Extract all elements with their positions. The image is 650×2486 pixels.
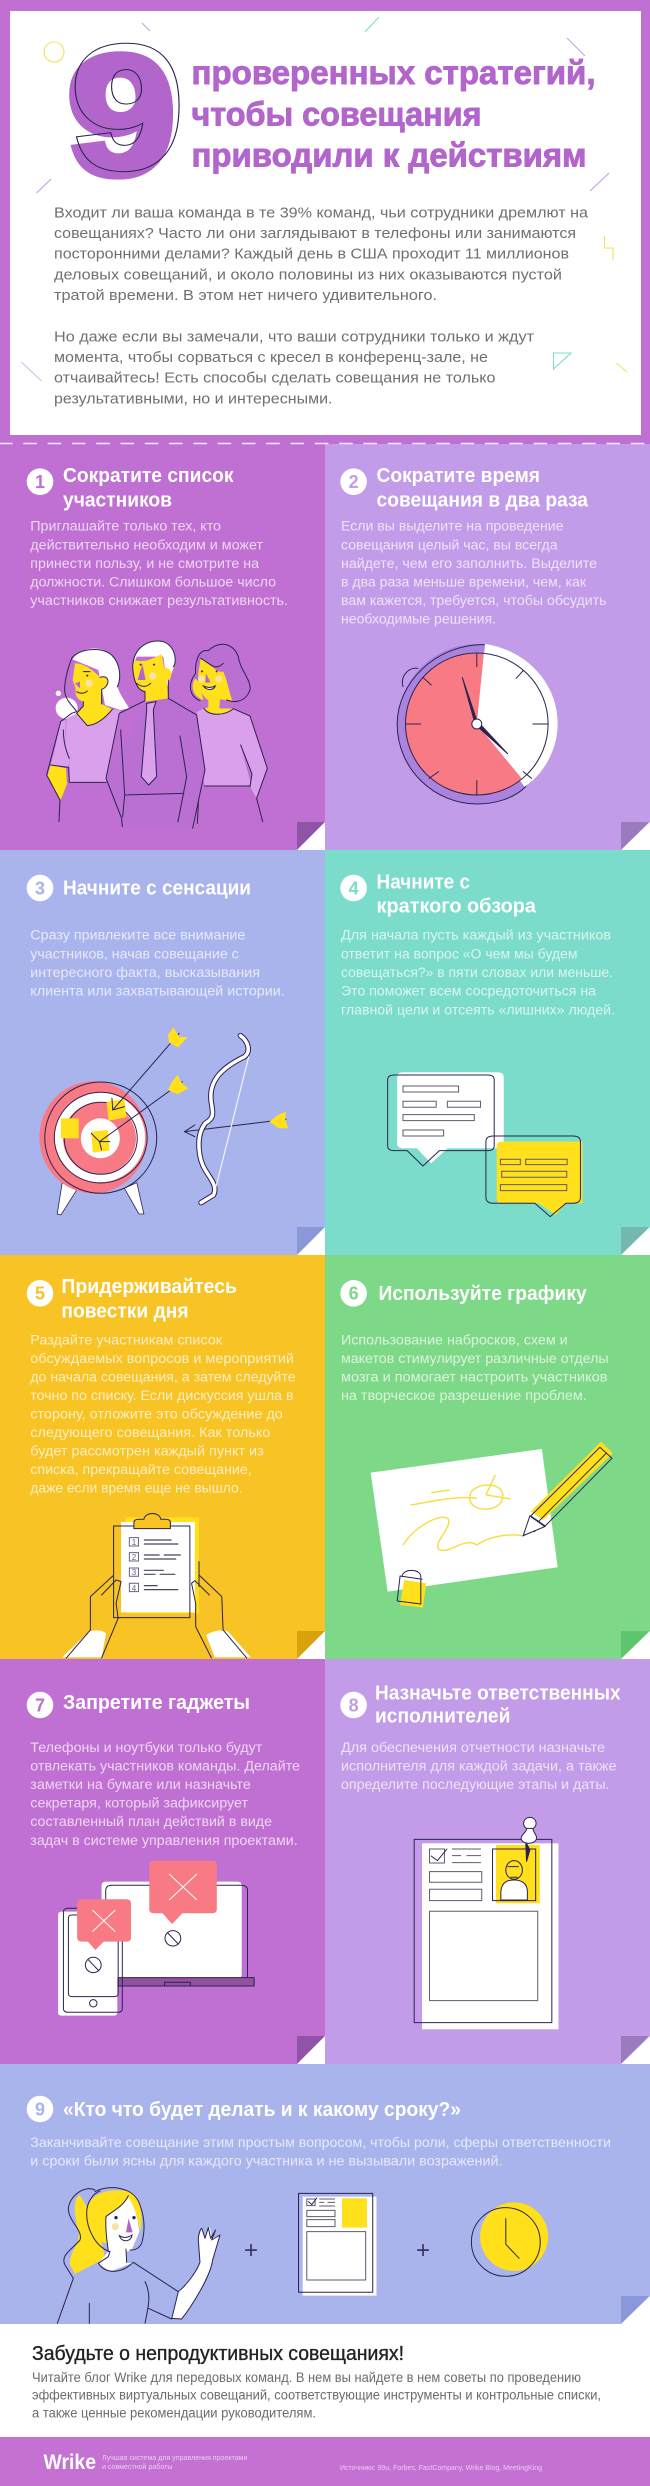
page fold 4	[621, 1227, 650, 1255]
intro text: отчаивайтесь! Есть способы сделать совещания не только	[54, 371, 496, 387]
clipboard numbers: 1	[132, 1538, 137, 1547]
heading 9: «Кто что будет делать и к какому сроку?»	[63, 2099, 461, 2121]
illustration: task card with pin	[414, 1817, 558, 2029]
closing text: эффективных виртуальных совещаний, соответствующие инструменты и контрольные списки,	[32, 2388, 601, 2403]
illustration: clipboard and hands	[62, 1514, 251, 1658]
title: приводили к действиям	[192, 137, 586, 174]
badge 2	[340, 468, 367, 495]
big numeral 9	[69, 42, 180, 180]
heading 2: совещания в два раза	[376, 490, 589, 512]
panel: 7 ban gadgets	[0, 1659, 325, 2064]
text 1: должности. Слишком большое число	[30, 574, 276, 589]
text 5: даже если время еще не вышло.	[30, 1481, 243, 1496]
text 4	[341, 928, 615, 1017]
text 4: совещаться?» в пяти словах или меньше.	[341, 965, 613, 980]
text 5: следующего совещания. Как только	[30, 1425, 270, 1440]
dashed seam	[0, 442, 650, 444]
panel: 9 who does what by when	[0, 2064, 650, 2324]
badge 7	[27, 1692, 53, 1718]
heading 1	[63, 465, 234, 512]
man	[106, 641, 205, 828]
closing text	[32, 2370, 601, 2420]
page fold 2	[621, 822, 650, 850]
text 1	[30, 519, 288, 608]
heading 8: исполнителей	[375, 1706, 510, 1728]
intro text: тратой времени. В этом нет ничего удивительного.	[54, 288, 437, 304]
panel: 5 agenda	[0, 1255, 325, 1659]
text 2: вам кажется, требуется, чтобы обсудить	[341, 593, 606, 608]
illustration: chat bubbles	[388, 1072, 583, 1217]
intro text: совещаниях? Часто ли они заглядывают в телефоны или занимаются	[54, 226, 576, 242]
text 3: Сразу привлеките все внимание	[30, 928, 245, 943]
text 8: исполнителя для каждой задачи, а также	[341, 1759, 616, 1774]
clipboard numbers: 3	[132, 1568, 137, 1577]
intro text: момента, чтобы сорваться с кресел в конференц-зале, не	[54, 350, 488, 366]
badge 1: 1	[35, 472, 45, 492]
heading 6: Используйте графику	[378, 1283, 588, 1305]
title: проверенных стратегий,	[192, 54, 596, 91]
text 1: действительно необходим и может	[30, 537, 263, 552]
text 7: отвлекать участников команды. Делайте	[30, 1759, 300, 1774]
panel: 1 fewer participants	[0, 444, 325, 850]
intro text	[54, 205, 589, 407]
clipboard numbers: 2	[132, 1553, 137, 1562]
page fold 5	[297, 1631, 325, 1659]
big numeral 9: 9	[67, 20, 176, 210]
closing text: а также ценные рекомендации руководителям.	[32, 2405, 316, 2420]
right woman	[190, 644, 267, 823]
panel: header	[0, 0, 650, 450]
badge 9	[27, 2096, 53, 2122]
heading 3: Начните с сенсации	[63, 877, 251, 899]
intro text: посторонними делами? Каждый день в США проходит 11 миллионов	[54, 247, 569, 263]
badge 4	[340, 875, 367, 901]
text 7: Телефоны и ноутбуки только будут	[30, 1740, 262, 1755]
text 8: определите последующие этапы и даты.	[341, 1777, 610, 1792]
panel: 6 graphics	[325, 1255, 650, 1659]
badge 5: 5	[35, 1284, 45, 1304]
badge 4: 4	[349, 878, 359, 898]
text 6: мозга и помогает настроить участников	[341, 1369, 607, 1384]
clipboard numbers: 4	[132, 1584, 137, 1593]
text 1: участников снижает результативность.	[30, 593, 288, 608]
left woman	[47, 649, 129, 822]
text 6	[341, 1332, 609, 1403]
heading 4	[376, 871, 537, 917]
badge 3	[27, 875, 53, 901]
text 7: секретаря, который зафиксирует	[30, 1796, 248, 1811]
text 5: точно по списку. Если дискуссия ушла в	[30, 1388, 294, 1403]
heading 4: краткого обзора	[376, 895, 537, 917]
illustration: three people	[47, 641, 267, 828]
badge 6	[340, 1280, 367, 1307]
badge 7: 7	[35, 1695, 45, 1715]
tagline: и совместной работы	[102, 2462, 172, 2471]
badge 9: 9	[35, 2099, 45, 2119]
text 5	[30, 1332, 296, 1496]
text 5: списка, прекращайте совещание,	[30, 1462, 252, 1477]
panel: 8 assign owners	[325, 1659, 650, 2064]
text 2: совещания целый час, вы всегда	[341, 537, 558, 552]
illustration: laptop and phone	[58, 1861, 254, 2016]
clipboard numbers	[132, 1538, 137, 1593]
badge 5	[27, 1280, 53, 1307]
illustration: waving woman	[57, 2188, 220, 2323]
illustration: clock	[397, 644, 558, 804]
heading 4: Начните с	[376, 871, 470, 893]
decorative confetti	[22, 17, 627, 381]
text 9: Заканчивайте совещание этим простым вопросом, чтобы роли, сферы ответственности	[30, 2135, 611, 2150]
text 4: Это поможет всем сосредоточиться на	[341, 984, 597, 999]
text 3	[30, 928, 285, 999]
heading 5	[61, 1276, 237, 1323]
text 2: необходимые решения.	[341, 612, 496, 626]
illustration: task card	[299, 2193, 376, 2296]
text 5: Раздайте участникам список	[30, 1332, 222, 1347]
logo: Wrike	[44, 2451, 96, 2474]
text 9	[30, 2135, 611, 2169]
heading 8	[375, 1682, 621, 1728]
heading 5: повестки дня	[61, 1301, 189, 1323]
text 7: составленный план действий в виде	[30, 1814, 272, 1829]
heading 1: участников	[63, 490, 172, 512]
illustration: target and bow	[39, 1027, 288, 1215]
plus sign: +	[244, 2237, 258, 2264]
text 3: участников, начав совещание с	[30, 946, 239, 961]
closing call to action	[32, 2343, 601, 2420]
intro text: результативными, но и интересными.	[54, 391, 332, 407]
heading 7: Запретите гаджеты	[63, 1692, 250, 1714]
heading 2	[376, 465, 589, 512]
plus sign: +	[416, 2237, 430, 2264]
text 5: до начала совещания, а затем следуйте	[30, 1369, 296, 1384]
text 2: найдете, чем его заполнить. Выделите	[341, 556, 597, 571]
heading 5: Придерживайтесь	[61, 1276, 237, 1298]
badge 1	[27, 468, 53, 495]
text 5: будет рассмотрен каждый пункт из	[30, 1444, 264, 1459]
badge 8: 8	[349, 1695, 359, 1715]
page fold 1	[297, 822, 325, 850]
heading 2: Сократите время	[376, 465, 540, 487]
text 2: Если вы выделите на проведение	[341, 519, 564, 534]
heading 8: Назначьте ответственных	[375, 1682, 621, 1704]
badge 3: 3	[35, 878, 45, 898]
illustration: sketch and pencil	[371, 1442, 613, 1608]
text 5: обсуждаемых вопросов и мероприятий	[30, 1351, 294, 1366]
text 7: заметки на бумаге или назначьте	[30, 1777, 251, 1792]
footer	[0, 2437, 650, 2486]
text 3: интересного факта, высказывания	[30, 965, 260, 980]
panel: 2 halve the time	[325, 444, 650, 850]
tagline: Лучшая система для управления проектами	[102, 2453, 248, 2462]
page fold 3	[297, 1227, 325, 1255]
title: чтобы совещания	[192, 96, 482, 133]
closing text: Читайте блог Wrike для передовых команд. В нем вы найдете в нем советы по проведению	[32, 2370, 581, 2385]
title	[192, 54, 596, 174]
text 1: принести пользу, и не смотрите на	[30, 556, 260, 571]
text 3: клиента или захватывающей истории.	[30, 984, 285, 999]
text 4: Для начала пусть каждый из участников	[341, 928, 611, 943]
text 6: Использование набросков, схем и	[341, 1332, 568, 1347]
page fold 6	[621, 1631, 650, 1659]
text 7	[30, 1740, 300, 1848]
page fold 9	[621, 2296, 650, 2324]
sources: Источники: 99u, Forbes, FastCompany, Wrike Blog, MeetingKing	[340, 2463, 542, 2472]
text 2: в два раза меньше времени, чем, как	[341, 574, 586, 589]
text 9: и сроки были ясны для каждого участника и не вызывали возражений.	[30, 2154, 502, 2169]
closing heading: Забудьте о непродуктивных совещаниях!	[32, 2343, 404, 2365]
illustration: yellow clock	[471, 2202, 548, 2276]
badge 8	[340, 1692, 367, 1718]
intro text: Входит ли ваша команда в те 39% команд, чьи сотрудники дремлют на	[54, 205, 589, 221]
badge 6: 6	[349, 1284, 359, 1304]
text 6: на творческое разрешение проблем.	[341, 1388, 587, 1403]
page fold 7	[297, 2036, 325, 2064]
page fold 8	[621, 2036, 650, 2064]
panel: 4 brief overview	[325, 850, 650, 1255]
intro text: деловых совещаний, и около половины из них оказываются пустой	[54, 267, 562, 283]
text 8	[341, 1740, 616, 1792]
text 5: сторону, отложите это обсуждение до	[30, 1406, 283, 1422]
panel: 3 start with a sensation	[0, 850, 325, 1255]
heading 1: Сократите список	[63, 465, 234, 487]
text 4: ответит на вопрос «О чем мы будем	[341, 946, 578, 961]
text 1: Приглашайте только тех, кто	[30, 519, 221, 534]
text 6: макетов стимулирует различные отделы	[341, 1351, 609, 1366]
badge 2: 2	[349, 472, 359, 492]
text 4: главной цели и отсеять «лишних» людей.	[341, 1002, 615, 1017]
tagline	[102, 2453, 248, 2471]
text 2	[341, 519, 606, 626]
text 8: Для обеспечения отчетности назначьте	[341, 1740, 605, 1755]
text 7: задач в системе управления проектами.	[30, 1833, 298, 1848]
intro text: Но даже если вы замечали, что ваши сотрудники только и ждут	[54, 329, 534, 345]
